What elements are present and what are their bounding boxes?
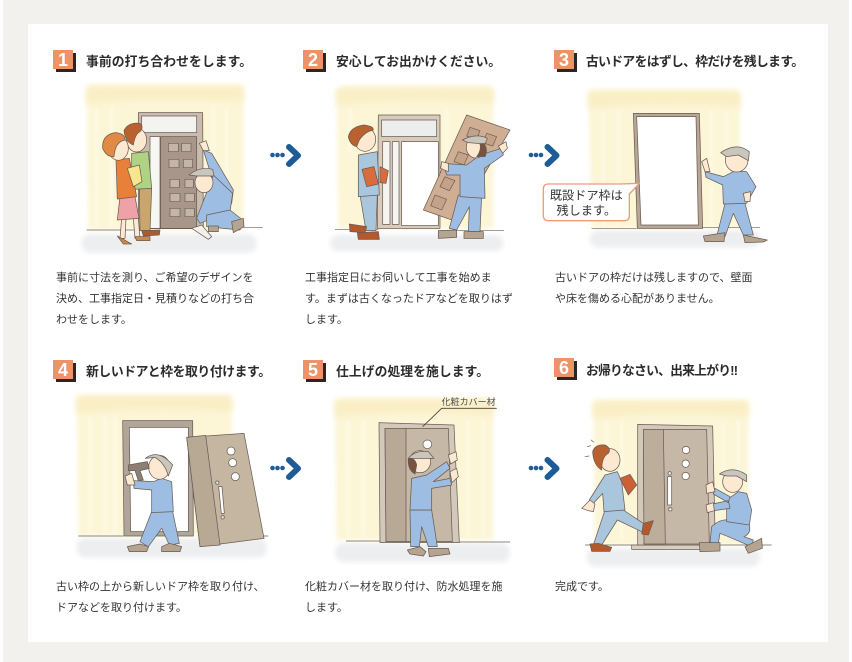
heading: step 3: 3 xyxy=(559,50,569,70)
heading: step 2: 安心してお出かけください。 xyxy=(336,54,501,69)
text: step 2 description: 工事指定日にお伺いして工事を始めま xyxy=(305,270,492,284)
heading: step 4 xyxy=(53,360,271,382)
worker xyxy=(717,203,753,237)
worker xyxy=(203,150,233,203)
heading: step 5: 5 xyxy=(308,360,318,380)
illustration: step 4 installing new frame xyxy=(77,395,268,558)
text: step 2 description: す。まずは古くなったドアなどを取りはず xyxy=(305,292,513,305)
heading: step 3 xyxy=(554,50,804,72)
text: step 3 description: や床を傷める心配がありません。 xyxy=(555,291,720,305)
heading: step 6 xyxy=(554,358,738,380)
heading: step 1: 事前の打ち合わせをします。 xyxy=(86,54,252,69)
heading: step 5: 仕上げの処理を施します。 xyxy=(336,364,489,379)
callout: existing frame remains: 既設ドア枠は xyxy=(550,188,623,202)
arrow: 4 to 5 xyxy=(270,460,298,477)
text: step 6 description: 完成です。 xyxy=(555,580,609,593)
callout: existing frame remains xyxy=(543,183,639,221)
arrow: 1 to 2 xyxy=(270,147,298,164)
illustration: step 5 fitting cover material xyxy=(335,396,510,562)
text: step 3 description: 古いドアの枠だけは残しますので、壁面 xyxy=(555,270,753,284)
label: cosmetic cover material xyxy=(423,396,497,427)
label: cosmetic cover material: 化粧カバー材 xyxy=(442,396,496,407)
text: step 2 description: します。 xyxy=(305,313,348,326)
worker xyxy=(410,510,437,547)
heading: step 4: 4 xyxy=(58,360,68,380)
text: step 1 description: 事前に寸法を測り、ご希望のデザインを xyxy=(56,270,254,284)
text: step 1 description: わせをします。 xyxy=(56,313,132,326)
heading: step 3: 古いドアをはずし、枠だけを残します。 xyxy=(586,54,804,69)
heading: step 4: 新しいドアと枠を取り付けます。 xyxy=(86,364,271,379)
illustration: step 1 consultation at door xyxy=(82,85,263,253)
arrow: 5 to 6 xyxy=(529,460,556,477)
text: step 1 description: 決め、工事指定日・見積りなどの打ち合 xyxy=(56,291,254,305)
illustration: step 3 frame remains xyxy=(543,90,767,247)
man xyxy=(360,195,377,231)
heading: step 6: 6 xyxy=(559,358,569,378)
heading: step 1 xyxy=(53,50,252,72)
callout: existing frame remains: 残します。 xyxy=(557,204,616,218)
heading: step 6: お帰りなさい、出来上がり!! xyxy=(586,363,738,378)
worker xyxy=(140,512,179,547)
illustration: step 6 finished door xyxy=(582,400,772,567)
heading: step 5 xyxy=(303,360,489,382)
heading: step 2 xyxy=(303,50,501,72)
woman xyxy=(120,218,140,238)
arrow: 2 to 3 xyxy=(529,147,556,164)
worker xyxy=(710,520,753,547)
heading: step 2: 2 xyxy=(308,50,318,70)
man xyxy=(593,510,648,545)
heading: step 1: 1 xyxy=(58,50,68,70)
text: step 5 description: 化粧カバー材を取り付け、防水処理を施 xyxy=(305,579,502,593)
text: step 5 description: します。 xyxy=(305,601,348,614)
text: step 4 description: ドアなどを取り付けます。 xyxy=(56,601,187,614)
illustration: step 2 removing old door xyxy=(330,87,510,251)
text: step 4 description: 古い枠の上から新しいドア枠を取り付け、 xyxy=(56,579,264,593)
man xyxy=(139,188,152,231)
worker xyxy=(449,195,482,232)
